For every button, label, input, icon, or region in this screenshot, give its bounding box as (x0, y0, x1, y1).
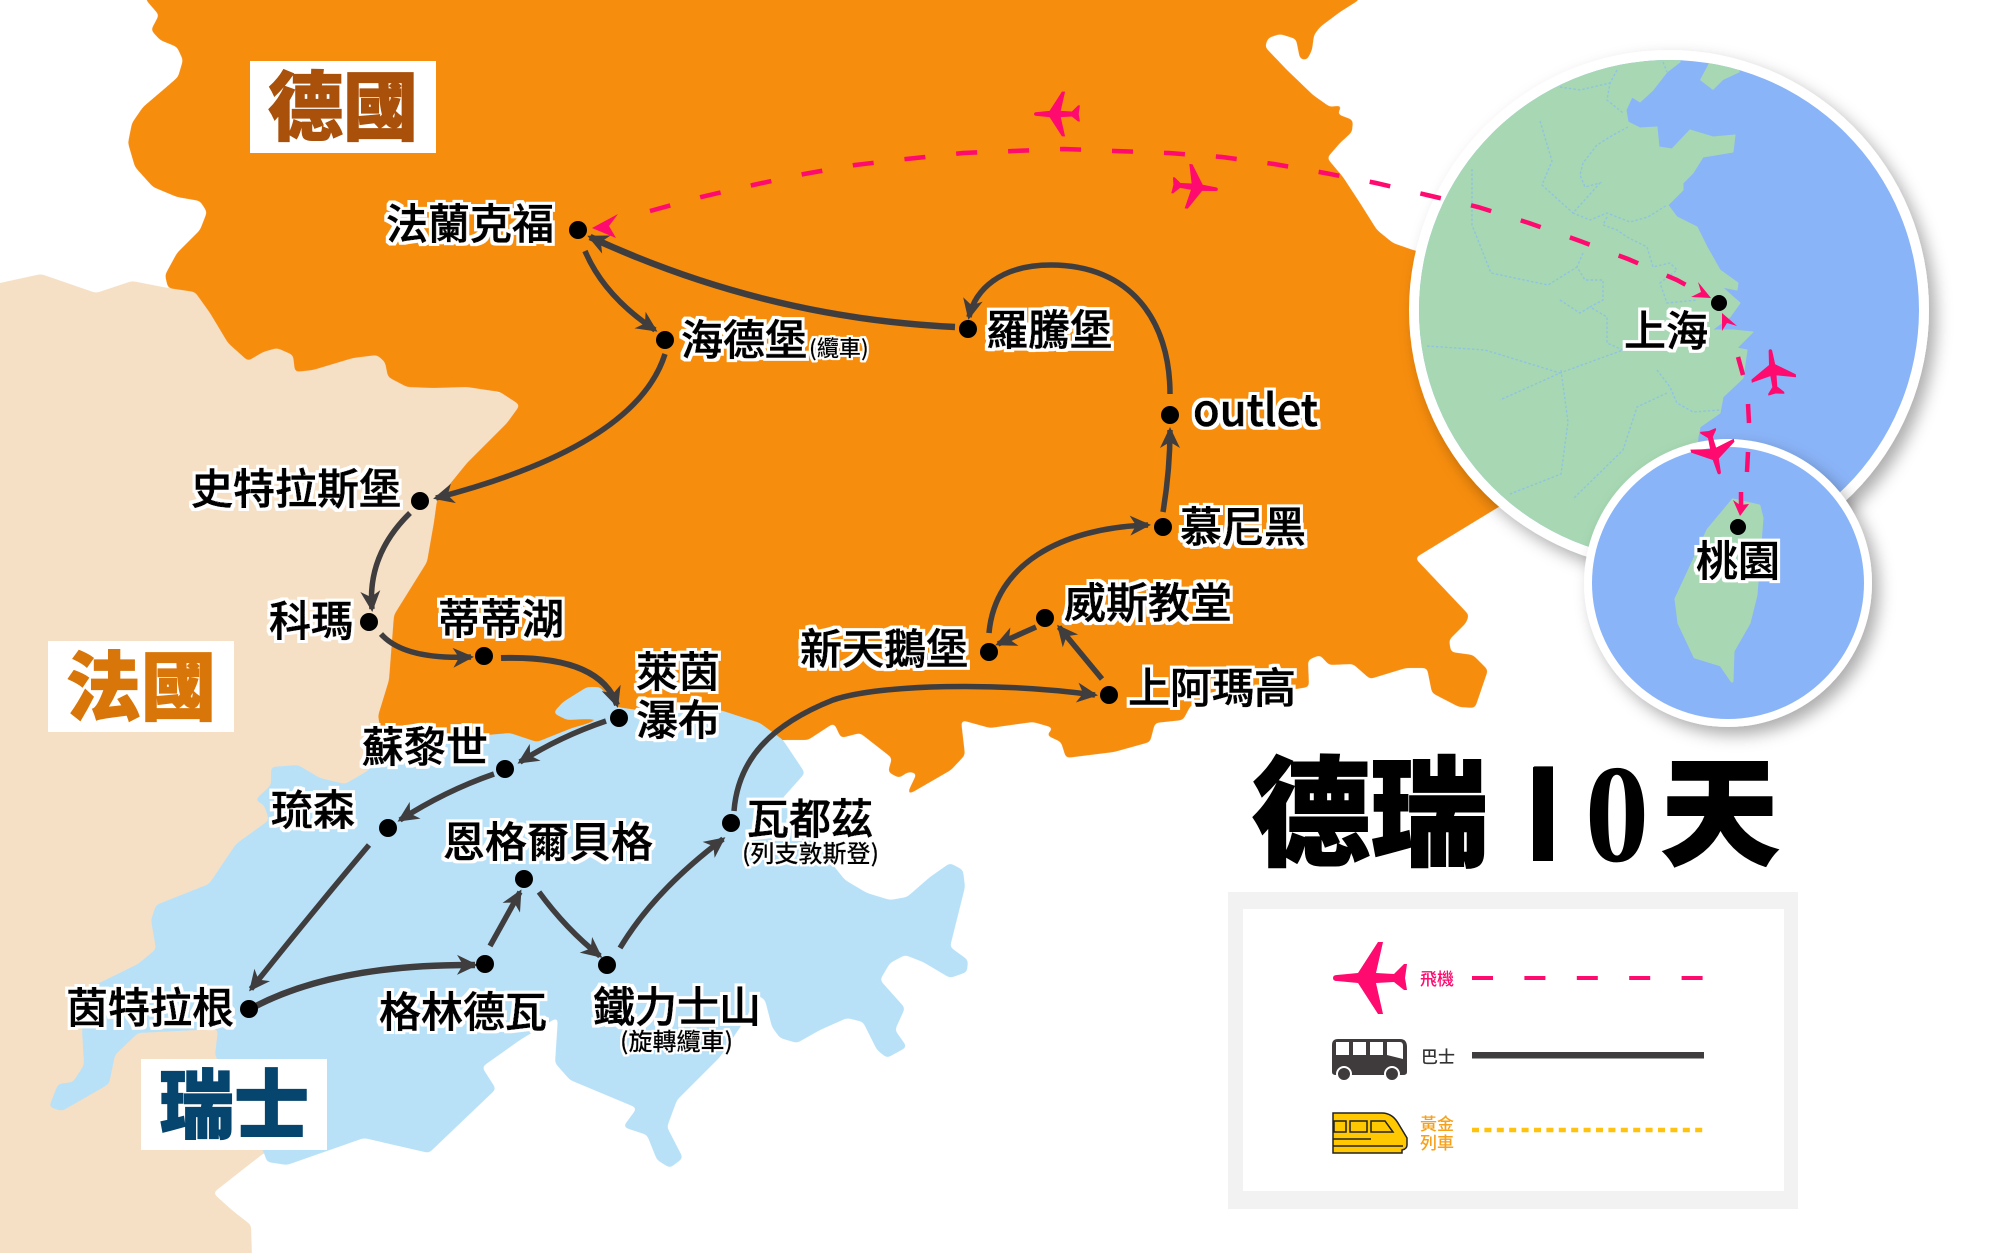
title (1252, 753, 1780, 869)
label: Colmar: 科瑪 (269, 588, 353, 649)
label: Rothenburg: 羅騰堡 (986, 297, 1112, 358)
label: Rhine Falls: 萊茵 (636, 639, 720, 700)
map: Switzerland region (49, 687, 968, 1168)
title: 天 (1661, 719, 1779, 890)
legend: train label: 黃金 (1420, 1110, 1454, 1135)
label: Munich: 慕尼黑 (1180, 494, 1306, 555)
inset map: Taiwan (1584, 439, 1872, 727)
label: Vaduz: 瓦都茲 (747, 786, 873, 847)
map: France region (0, 274, 525, 1253)
legend: plane dashed line (1472, 976, 1703, 980)
label: Zurich: 蘇黎世 (362, 714, 488, 775)
label: Titlis: (旋轉纜車) (620, 1022, 733, 1057)
label: Titisee: 蒂蒂湖 (438, 586, 564, 647)
stop markers (240, 221, 1746, 1018)
icon: plane return (1170, 162, 1220, 212)
legend: train icon (1333, 1113, 1407, 1153)
label: Rhine Falls (636, 639, 720, 748)
label: Shanghai: 上海 (1624, 298, 1708, 359)
label: Lucerne: 琉森 (271, 777, 355, 838)
legend: bus icon (1332, 1039, 1407, 1081)
legend: train label: 列車 (1420, 1129, 1454, 1154)
label: Heidelberg (681, 307, 869, 368)
legend: train dotted line (1472, 1128, 1704, 1132)
label box: France: 法國 (66, 627, 216, 736)
legend: plane icon (1333, 942, 1407, 1014)
inset map: East China coast (1406, 48, 1946, 572)
icon: plane to Taiwan (1687, 424, 1741, 480)
label: Frankfurt: 法蘭克福 (386, 191, 554, 252)
bus route: connected arrows (251, 237, 1170, 1007)
legend: train label (1420, 1110, 1454, 1154)
legend: plane label: 飛機 (1420, 965, 1454, 990)
label: Oberammergau: 上阿瑪高 (1128, 655, 1296, 716)
icon: plane over sea (1748, 347, 1798, 397)
map: Germany region (128, 0, 1600, 796)
label: Wieskirche: 威斯教堂 (1064, 570, 1232, 631)
title: 1 (1502, 738, 1578, 890)
label: Grindelwald: 格林德瓦 (379, 979, 547, 1040)
label box: Switzerland: 瑞士 (159, 1045, 309, 1154)
label: Engelberg: 恩格爾貝格 (443, 809, 653, 870)
label: Rhine Falls: 瀑布 (636, 687, 720, 748)
label: outlet: outlet (1193, 375, 1318, 439)
label: Neuschwanstein: 新天鵝堡 (800, 616, 968, 677)
legend: bus solid line (1472, 1052, 1704, 1058)
icon: plane near Germany north (1034, 92, 1080, 136)
label: Interlaken: 茵特拉根 (66, 975, 234, 1036)
label box: Germany: 德國 (268, 47, 418, 156)
label: Vaduz (742, 786, 879, 869)
label: Taoyuan: 桃園 (1696, 528, 1780, 589)
label: Heidelberg: 海德堡 (681, 307, 807, 368)
flight route: dashed line (592, 149, 1749, 516)
title: 0 (1585, 737, 1649, 892)
label: Vaduz: (列支敦斯登) (742, 834, 879, 869)
panel: legend (1228, 892, 1798, 1209)
label: Titlis: 鐵力士山 (593, 974, 761, 1035)
label: Heidelberg: (纜車) (809, 331, 869, 363)
label: Strasbourg: 史特拉斯堡 (191, 456, 401, 517)
title: 德瑞 (1252, 719, 1488, 890)
legend: bus label: 巴士 (1421, 1043, 1455, 1068)
